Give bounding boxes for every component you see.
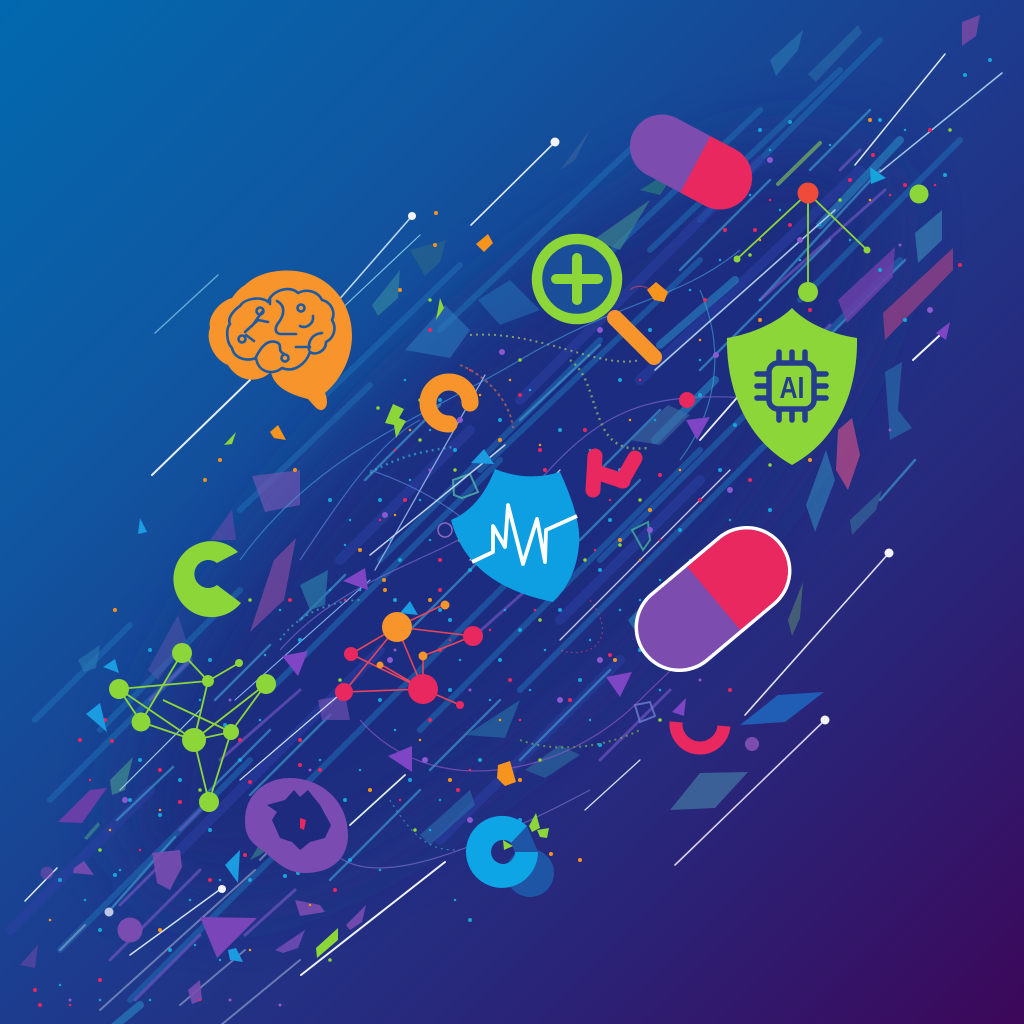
icon: red U [674, 722, 724, 750]
icon: magnifying glass with plus [537, 239, 654, 357]
small accent shapes [86, 167, 950, 962]
icon: blue heartbeat shield [451, 469, 579, 602]
icon: capsule top [619, 103, 763, 221]
network: top right [734, 182, 928, 302]
icon: brain [209, 271, 352, 410]
icon: AI shield green [727, 308, 857, 465]
node: purple dot [745, 737, 759, 751]
icon: pink H glyph [593, 456, 635, 490]
icon: lightning mark [385, 404, 406, 438]
icon: large capsule [619, 510, 807, 688]
icon: green C [173, 541, 241, 617]
network: green bottom left [109, 643, 276, 812]
label: AI chip text: AI [780, 370, 804, 405]
thin network curves [240, 250, 780, 868]
node: purple dots lower left [40, 866, 142, 942]
icon: blue C bottom [466, 813, 554, 897]
network: red and orange [335, 600, 483, 709]
icon: purple blob with notched centre [245, 778, 348, 873]
icon: orange C [428, 382, 470, 424]
node: red dot right [679, 392, 695, 408]
